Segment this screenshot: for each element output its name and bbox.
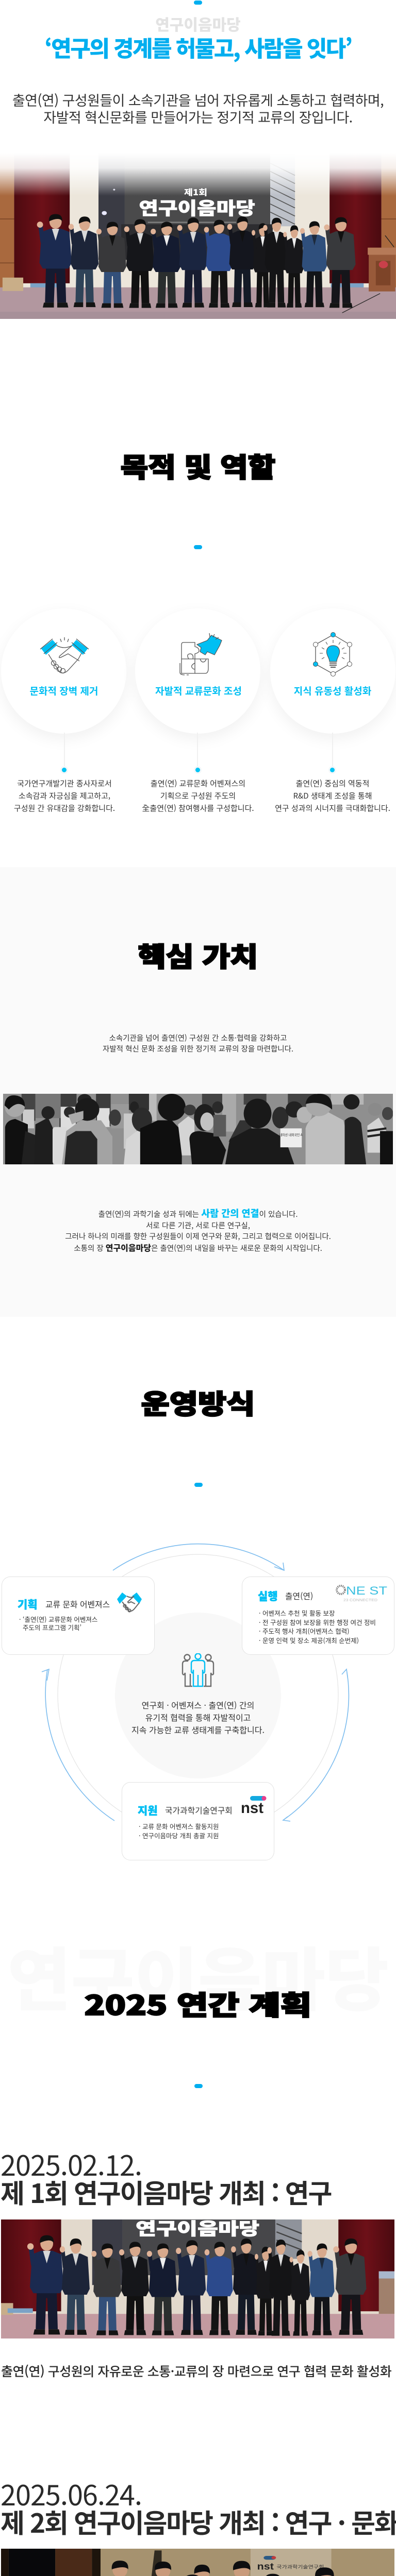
photo: award ceremony [1,2549,394,2576]
photo: group photo on stage [0,158,396,319]
accent dot [194,2084,203,2088]
heading: 2025 연간 계획 [85,1984,311,2023]
execution details: · 주도적 행사 개최(어벤져스 협력) [259,1626,349,1636]
center text [131,1699,265,1736]
center text: 지속 가능한 교류 생태계를 구축합니다. [131,1723,265,1736]
description 1 [14,778,115,814]
execution label: 실행 [258,1588,278,1604]
photo: award ceremony: nst [257,2561,274,2572]
center text: 유기적 협력을 통해 자발적이고 [145,1711,251,1723]
eyebrow title: 연구이음마당 [155,12,241,35]
heading: 운영방식 [141,1383,255,1421]
photo: crowd in grayscale: 네이션 내외국인 A [279,1132,303,1137]
closing message: 서로 다른 기관, 서로 다른 연구실, [146,1220,250,1230]
box: execution [242,1577,394,1655]
cycle diagram: rings and arrows [41,1544,350,1822]
closing message: 그러나 하나의 미래를 향한 구성원들이 이제 연구와 문화, 그리고 협력으로 이어집니다. [65,1231,331,1242]
photo: group shot [1,2219,394,2338]
planning icon [117,1592,142,1613]
description 3: 출연(연) 중심의 역동적 [296,778,369,789]
box: planning [2,1577,155,1655]
description 1: 소속감과 자긍심을 제고하고, [19,790,110,801]
center text: 연구회 · 어벤져스 · 출연(연) 간의 [142,1699,254,1711]
circle: voluntary exchange [135,608,260,734]
node 2 [195,768,200,772]
planning details: 주도의 프로그램 기획’ [23,1622,81,1632]
description 2: 全출연(연) 참여행사를 구성합니다. [142,803,254,814]
label: barrier removal: 문화적 장벽 제거 [29,684,98,698]
description 2 [142,778,254,814]
execution details: · 운영 인력 및 장소 제공(개최 순번제) [259,1635,359,1645]
intro paragraph: 자발적 혁신문화를 만들어가는 정기적 교류의 장입니다. [43,107,353,127]
execution details: · 전 구성원 참여 보장을 위한 행정 여건 정비 [259,1617,376,1627]
panel: intro [0,1,396,319]
support details [139,1821,219,1840]
support details: · 교류 문화 어벤져스 활동지원 [139,1821,219,1831]
planning owner: 교류 문화 어벤져스 [45,1598,110,1610]
node 1 [62,768,67,772]
icon: three people [182,1653,214,1687]
center message [131,1653,265,1736]
intro text [103,1032,293,1054]
event 2 [1,2473,396,2576]
execution details [259,1608,376,1645]
support details: · 연구이음마당 개최 총괄 지원 [139,1831,219,1840]
panel: purpose and role [10,446,390,814]
icon: handshake [40,637,89,674]
icon: puzzle [179,633,222,675]
circle: knowledge mobility [270,608,395,734]
intro paragraph: 출연(연) 구성원들이 소속기관을 넘어 자유롭게 소통하고 협력하며, [12,90,384,110]
closing message: 소통의 장 연구이음마당은 출연(연)의 내일을 바꾸는 새로운 문화의 시작입니다. [74,1241,322,1253]
accent dot [194,545,202,549]
accent dot [194,1483,203,1487]
icon: network light bulb [313,632,352,676]
description 2: 출연(연) 교류문화 어벤져스의 [151,778,245,789]
closing message [65,1207,331,1253]
intro paragraph [12,90,384,127]
box: support [122,1782,274,1860]
photo: group photo on stage: 제1회 [184,186,207,198]
intro text: 자발적 혁신 문화 조성을 위한 정기적 교류의 장을 마련합니다. [103,1043,293,1054]
date: 2025.02.12. [1,2143,142,2184]
execution owner: 출연(연) [285,1590,313,1602]
photo: crowd in grayscale [3,1094,393,1164]
planning details [19,1614,97,1632]
description 3 [275,778,390,814]
heading: 핵심 가치 [138,936,258,974]
logo: ONE ST: NE ST [346,1584,387,1597]
caption: 출연(연) 구성원의 자유로운 소통·교류의 장 마련으로 연구 협력 문화 활성화 [1,2362,391,2380]
panel: core value [0,867,396,1317]
support owner: 국가과학기술연구회 [165,1804,233,1816]
connector 3 [332,733,333,769]
date: 2025.06.24. [1,2473,142,2514]
node 3 [330,768,335,772]
label: knowledge activation: 지식 유동성 활성화 [294,684,371,698]
logo: ONE ST [336,1584,387,1602]
panel: 2025 annual plan [1,1925,396,2576]
connector 1 [64,733,65,769]
panel: operating model [2,1383,394,1860]
connector 2 [197,733,198,769]
ghost watermark: 연구이음마당 [7,1925,389,2025]
heading: 목적 및 역할 [121,446,275,485]
logo: ONE ST: 23 CONNECTED [343,1599,377,1602]
circle: cultural barriers [1,608,126,734]
closing message: 출연(연)의 과학기술 성과 뒤에는 사람 간의 연결이 있습니다. [98,1207,298,1220]
label: exchange culture: 자발적 교류문화 조성 [155,684,242,698]
planning details: · ‘출연(연) 교류문화 어벤져스 [19,1614,97,1624]
title: 제 2회 연구이음마당 개최 : 연구 · 문화 [1,2502,396,2540]
description 2: 기획으로 구성원 주도의 [160,790,236,801]
intro text: 소속기관을 넘어 출연(연) 구성원 간 소통·협력을 강화하고 [109,1032,287,1043]
photo: group photo on stage: 연구이음마당 [139,195,255,220]
planning label: 기획 [18,1597,38,1612]
description 3: R&D 생태계 조성을 통해 [293,790,372,801]
description 3: 연구 성과의 시너지를 극대화합니다. [275,803,390,814]
headline: ‘연구의 경계를 허물고, 사람을 잇다’ [44,31,352,63]
description 1: 구성원 간 유대감을 강화합니다. [14,803,115,814]
photo: award ceremony: 국가과학기술연구회 [276,2563,324,2570]
title: 제 1회 연구이음마당 개최 : 연구 [1,2173,331,2211]
event 1 [1,2143,394,2380]
execution details: · 어벤져스 추천 및 활동 보장 [259,1608,335,1618]
accent dot [194,1,202,5]
description 1: 국가연구개발기관 종사자로서 [17,778,112,789]
support label: 지원 [138,1803,158,1818]
